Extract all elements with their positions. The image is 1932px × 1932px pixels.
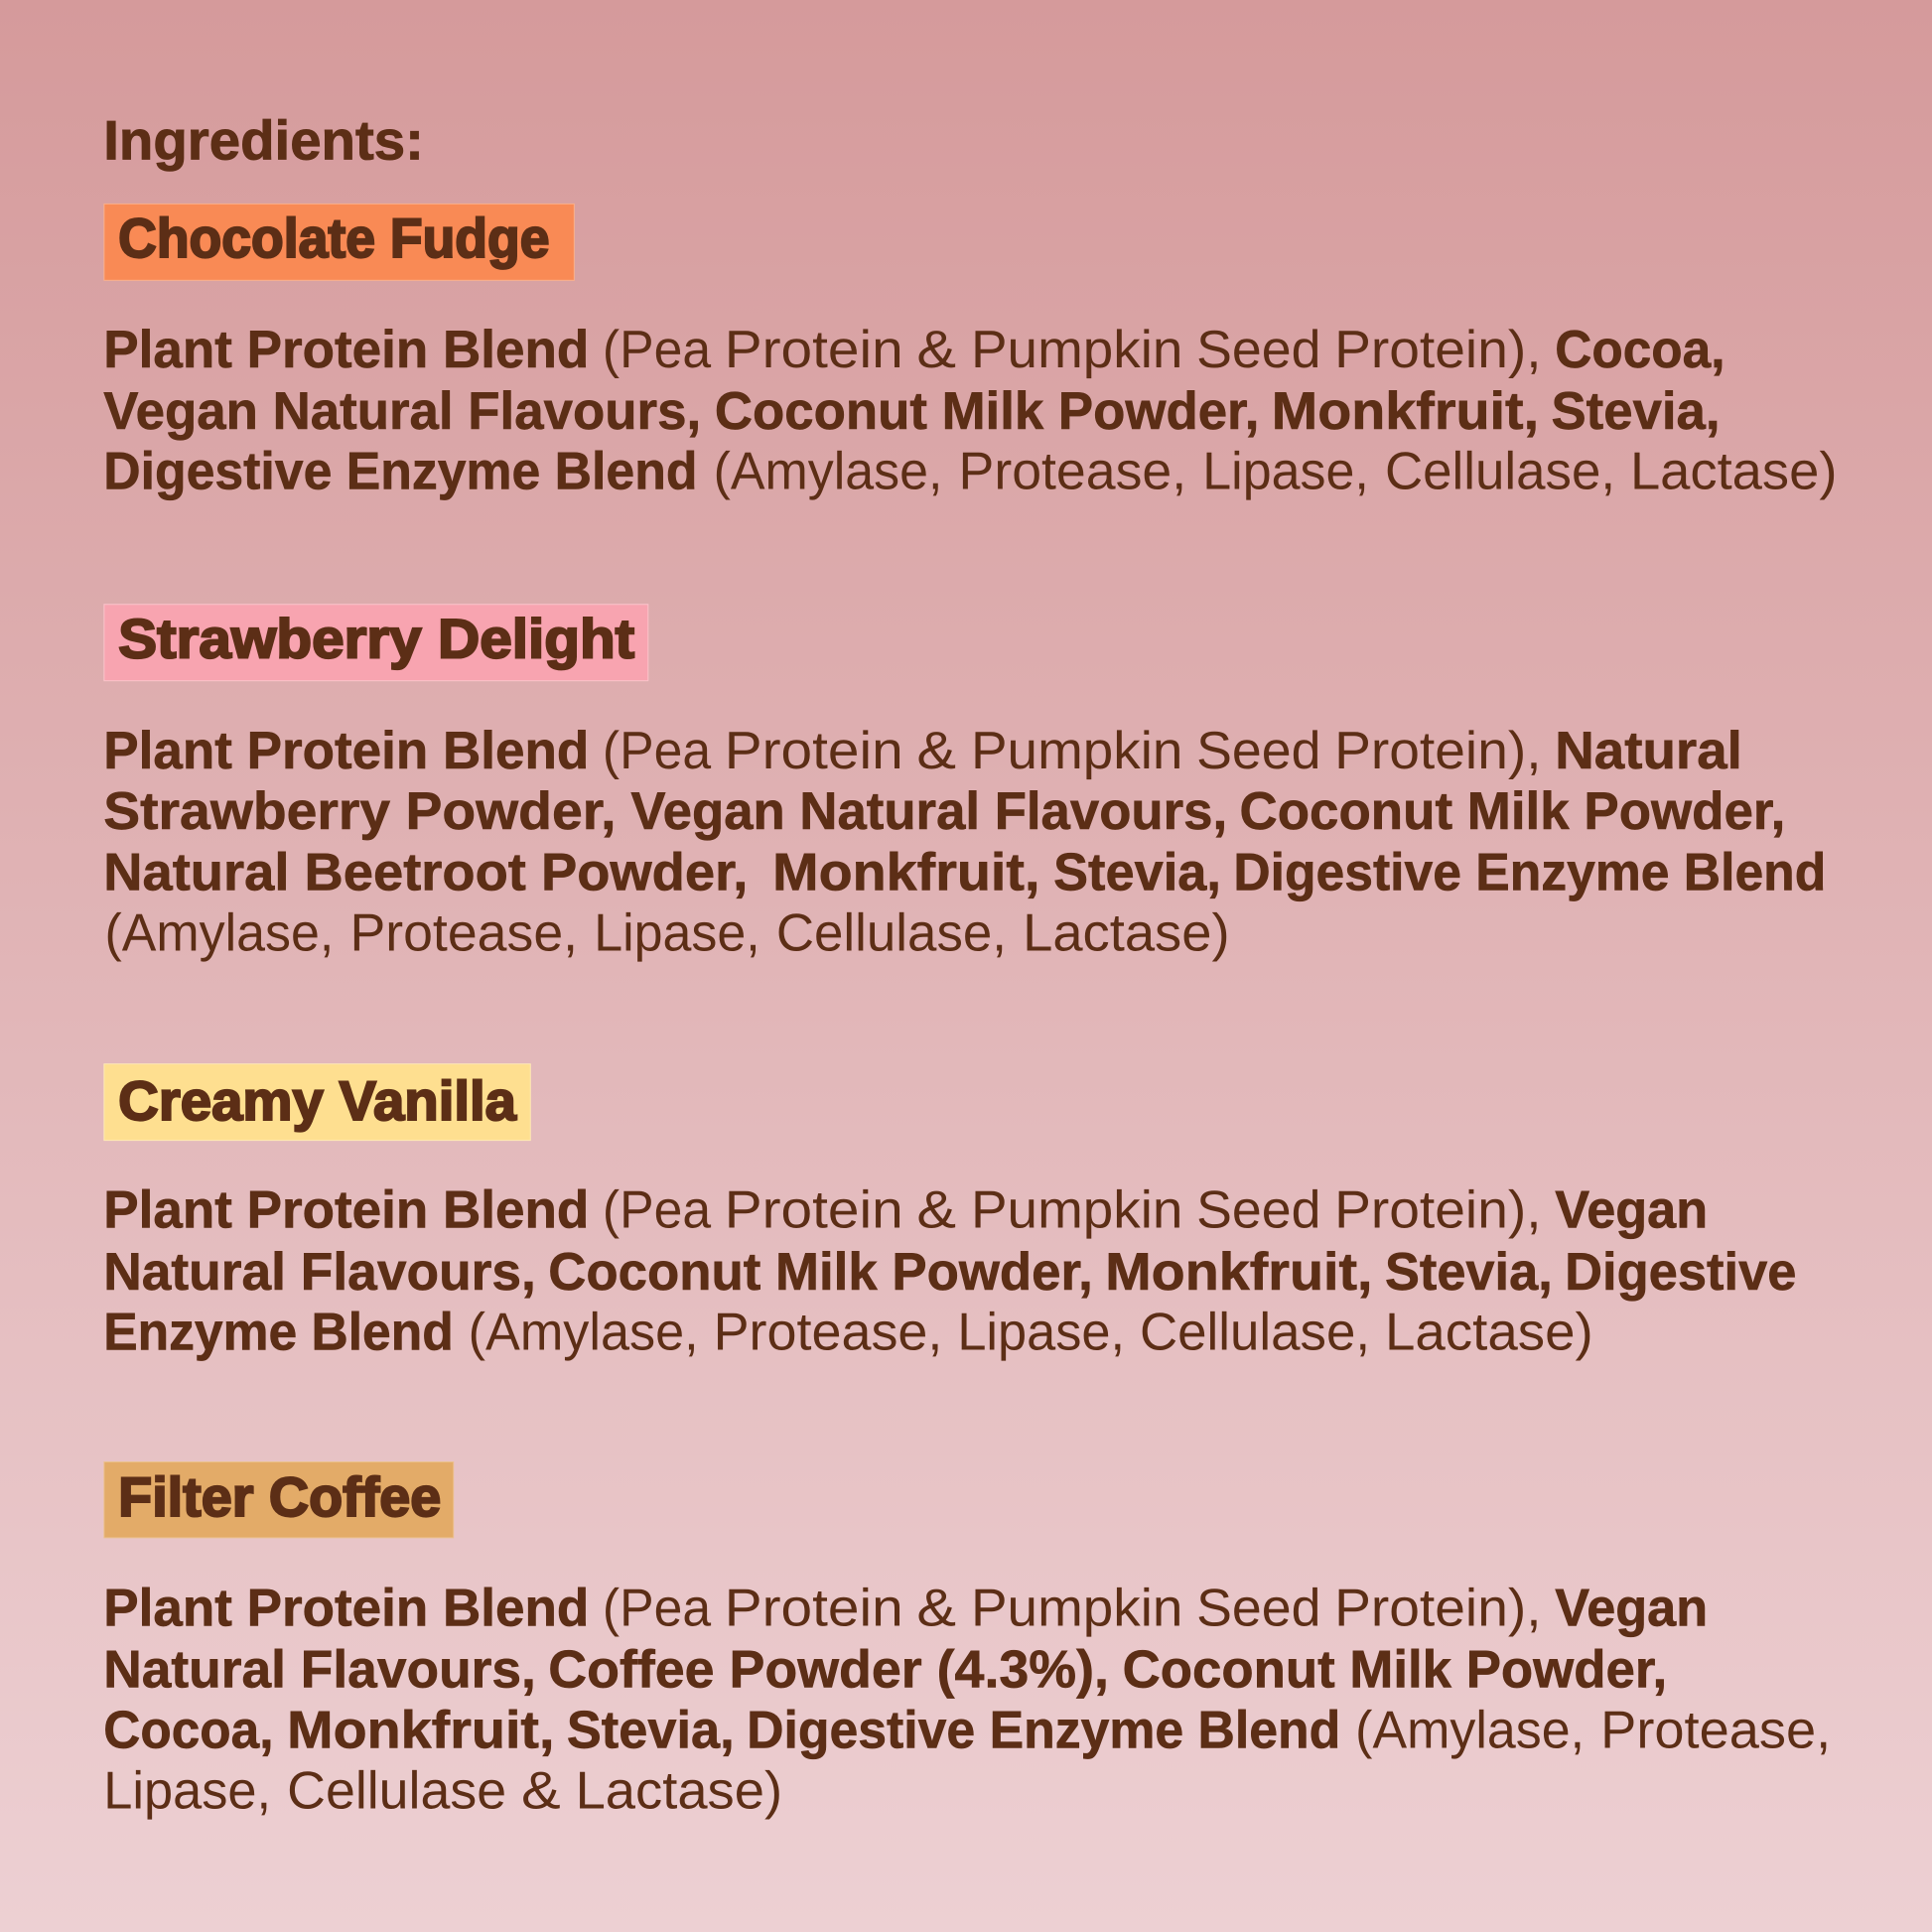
ingredient text: Filter Coffee: Protein), (1334, 1579, 1542, 1638)
ingredient text: Creamy Vanilla: Cellulase, (1140, 1303, 1370, 1362)
ingredient text: Strawberry Delight: Protein), (1334, 722, 1542, 780)
ingredient text: Creamy Vanilla: Lipase, (957, 1303, 1125, 1362)
ingredient text: Creamy Vanilla: Coconut Milk Powder, (548, 1243, 1093, 1302)
panel: Filter Coffee (103, 1462, 1831, 1821)
ingredient text: Filter Coffee: (Pea (603, 1579, 711, 1638)
ingredient text: Strawberry Delight: (Pea (603, 722, 711, 780)
ingredient text: Strawberry Delight: Protease, (349, 903, 578, 963)
title: Ingredients: (103, 109, 424, 172)
ingredient text: Filter Coffee: Vegan (1555, 1579, 1708, 1638)
ingredient text: Filter Coffee: Stevia, (567, 1701, 735, 1760)
ingredient text: Chocolate Fudge: Pumpkin (971, 321, 1182, 379)
ingredient text: Strawberry Delight: Natural Beetroot Powder, (103, 844, 748, 902)
ingredient text: Creamy Vanilla: Protease, (714, 1303, 942, 1362)
ingredient text: Creamy Vanilla: Protein), (1334, 1181, 1542, 1240)
ingredient text: Chocolate Fudge: Vegan Natural Flavours, (103, 382, 701, 441)
ingredient text: Filter Coffee: Natural Flavours, (103, 1640, 536, 1700)
ingredient text: Strawberry Delight: Cellulase, (776, 903, 1007, 963)
ingredient text: Strawberry Delight: Strawberry Powder, (103, 782, 617, 842)
ingredient text: Creamy Vanilla: Monkfruit, (1105, 1243, 1373, 1302)
ingredient text: Filter Coffee: Coconut Milk Powder, (1123, 1640, 1667, 1700)
ingredient text: Strawberry Delight: Coconut Milk Powder, (1240, 782, 1785, 842)
ingredient text: Strawberry Delight: Natural (1555, 722, 1742, 780)
ingredient text: Creamy Vanilla: Stevia, (1385, 1243, 1553, 1302)
ingredient text: Chocolate Fudge: (Pea (603, 321, 711, 379)
ingredient text: Creamy Vanilla (103, 1181, 1796, 1362)
tag: Creamy Vanilla: Creamy Vanilla (118, 1069, 517, 1133)
ingredient text: Filter Coffee: Coffee Powder (4.3%), (548, 1640, 1109, 1700)
ingredient text: Strawberry Delight: Lipase, (594, 903, 760, 963)
ingredient text: Chocolate Fudge (103, 321, 1837, 501)
ingredient text: Chocolate Fudge: Cocoa, (1555, 321, 1725, 379)
ingredient text: Filter Coffee: Lactase) (576, 1761, 782, 1821)
ingredient text: Filter Coffee: Digestive Enzyme Blend (747, 1701, 1340, 1760)
ingredient text: Filter Coffee: Lipase, (103, 1761, 271, 1821)
panel: Chocolate Fudge (103, 204, 1837, 501)
ingredient text: Chocolate Fudge: Monkfruit, (1272, 382, 1539, 441)
ingredient text: Creamy Vanilla: & (916, 1181, 957, 1240)
ingredient text: Strawberry Delight (103, 722, 1826, 963)
ingredient text: Strawberry Delight: Plant Protein Blend (103, 722, 589, 780)
ingredient text: Creamy Vanilla: Pumpkin (971, 1181, 1182, 1240)
ingredient text: Creamy Vanilla: Vegan (1555, 1181, 1708, 1240)
ingredient text: Chocolate Fudge: Coconut Milk Powder, (715, 382, 1259, 441)
ingredient text: Creamy Vanilla: Protein (725, 1181, 903, 1240)
ingredient text: Strawberry Delight: Vegan Natural Flavours, (630, 782, 1227, 842)
ingredient text: Chocolate Fudge: (Amylase, (714, 443, 942, 501)
tag: Strawberry Delight: Strawberry Delight (118, 608, 634, 670)
ingredient text: Strawberry Delight: Seed (1196, 722, 1320, 780)
ingredient text: Strawberry Delight: Protein (725, 722, 903, 780)
ingredient text: Filter Coffee (103, 1579, 1831, 1821)
ingredient text: Chocolate Fudge: & (916, 321, 957, 379)
panel: Strawberry Delight (103, 605, 1826, 963)
ingredient text: Strawberry Delight: Digestive Enzyme Blend (1233, 844, 1826, 902)
ingredient text: Creamy Vanilla: Plant Protein Blend (103, 1181, 589, 1240)
ingredient text: Creamy Vanilla: Seed (1196, 1181, 1320, 1240)
ingredient text: Filter Coffee: & (521, 1761, 561, 1821)
ingredient text: Chocolate Fudge: Cellulase, (1385, 443, 1615, 501)
ingredient text: Filter Coffee: Plant Protein Blend (103, 1579, 589, 1638)
ingredient text: Filter Coffee: Protease, (1600, 1701, 1831, 1760)
ingredient text: Chocolate Fudge: Stevia, (1552, 382, 1721, 441)
ingredient text: Filter Coffee: Pumpkin (971, 1579, 1182, 1638)
ingredient text: Filter Coffee: Monkfruit, (287, 1701, 554, 1760)
ingredient text: Filter Coffee: Protein (725, 1579, 903, 1638)
ingredient text: Strawberry Delight: Pumpkin (971, 722, 1182, 780)
tag: Filter Coffee: Filter Coffee (118, 1465, 441, 1529)
ingredient text: Chocolate Fudge: Lactase) (1630, 443, 1837, 501)
ingredient text: Filter Coffee: & (916, 1579, 957, 1638)
ingredient text: Filter Coffee: Cocoa, (103, 1701, 274, 1760)
ingredient text: Strawberry Delight: Stevia, (1053, 844, 1221, 902)
ingredient text: Chocolate Fudge: Digestive Enzyme Blend (103, 443, 697, 501)
ingredient text: Chocolate Fudge: Plant Protein Blend (103, 321, 589, 379)
ingredient text: Filter Coffee: (Amylase, (1355, 1701, 1585, 1760)
ingredient text: Chocolate Fudge: Protease, (959, 443, 1186, 501)
ingredient text: Strawberry Delight: Monkfruit, (772, 844, 1039, 902)
panel: Creamy Vanilla (103, 1064, 1796, 1362)
ingredient text: Strawberry Delight: (Amylase, (104, 903, 334, 963)
ingredient text: Chocolate Fudge: Protein), (1334, 321, 1542, 379)
ingredient text: Chocolate Fudge: Seed (1196, 321, 1320, 379)
ingredient text: Creamy Vanilla: Lactase) (1385, 1303, 1593, 1362)
ingredient text: Creamy Vanilla: Digestive (1565, 1243, 1796, 1302)
ingredient text: Chocolate Fudge: Lipase, (1202, 443, 1369, 501)
ingredient text: Creamy Vanilla: (Amylase, (469, 1303, 699, 1362)
ingredient text: Creamy Vanilla: Natural Flavours, (103, 1243, 536, 1302)
ingredient text: Strawberry Delight: Lactase) (1023, 903, 1230, 963)
ingredient text: Filter Coffee: Cellulase (287, 1761, 506, 1821)
ingredient text: Filter Coffee: Seed (1196, 1579, 1320, 1638)
ingredient text: Strawberry Delight: & (916, 722, 957, 780)
ingredient text: Chocolate Fudge: Protein (725, 321, 903, 379)
tag: Chocolate Fudge: Chocolate Fudge (118, 207, 550, 269)
ingredient text: Creamy Vanilla: Enzyme Blend (103, 1303, 454, 1362)
ingredient text: Creamy Vanilla: (Pea (603, 1181, 711, 1240)
